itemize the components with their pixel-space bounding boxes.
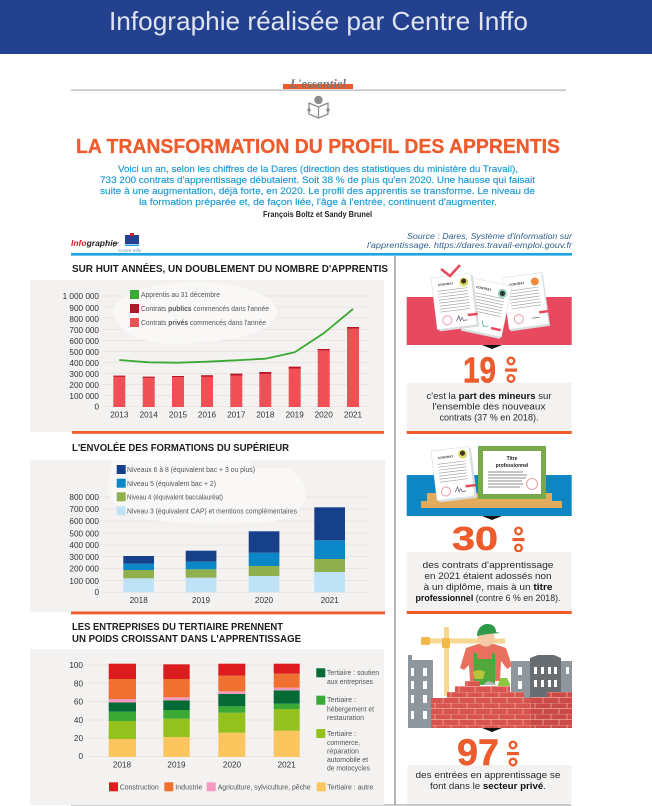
legend: right: de motocycles [327, 766, 370, 772]
legend: apprentices chart: Apprentis au 31 décembre [141, 292, 220, 299]
y axis labels: 100 000 [69, 392, 99, 401]
header banner: Infographie réalisée par Centre Inffo [109, 6, 528, 36]
legend: right: commerce, [327, 740, 360, 747]
certificate: professionnel [496, 463, 529, 469]
legend: right: aux entreprises [327, 679, 373, 686]
y axis labels: 500 000 [69, 348, 99, 357]
section tag: L'essentiel: L'essentiel [289, 76, 346, 91]
heading: supérieur: L'ENVOLÉE DES FORMATIONS DU SUPÉRIEUR [72, 441, 289, 454]
y axis labels: 500 000 [69, 530, 99, 538]
x axis labels: 2019 [167, 760, 186, 770]
legend: apprentices chart: Contrats privés commencés dans l'année [141, 320, 266, 327]
source note: Source : Dares, Système d'information sur [407, 231, 573, 241]
crane [421, 627, 505, 696]
intro text: 733 200 contrats d'apprentissage débutaient. Soit 38 % de plus qu'en 2020. Une hausse qui faisait [100, 175, 535, 186]
legend: levels: Niveau 5 (équivalent bac + 2) [127, 481, 216, 488]
description: private sector: des entrées en apprentissage se [416, 770, 560, 780]
y axis labels: 600 000 [69, 517, 99, 526]
description: title: des contrats d'apprentissage [422, 560, 554, 570]
x axis labels: 2018 [256, 410, 275, 420]
y axis labels: 60 [74, 698, 83, 706]
legend: bottom: Agriculture, sylviculture, pêche [218, 784, 311, 792]
stat: 19 %: 19 [463, 350, 496, 390]
y axis labels: 100 [69, 661, 83, 670]
panel: 30 % titre professionnel [407, 446, 572, 614]
y axis labels: 200 000 [69, 564, 99, 574]
description: title: professionnel (contre 6 % en 2018). [416, 593, 560, 603]
x axis labels: 2014 [140, 410, 158, 420]
legend: bottom: Tertiaire : autre [327, 784, 373, 792]
x axis labels: 2018 [113, 760, 132, 770]
line: apprentices [119, 309, 353, 363]
x axis labels: 2019 [286, 410, 304, 420]
illustration: bricklayer [408, 624, 572, 732]
panel: higher education stacked bars [30, 441, 385, 614]
illustration: contracts on red band [407, 265, 572, 349]
description: minors: contrats (37 % en 2018). [440, 412, 538, 422]
icon: reader with book [307, 96, 330, 118]
check mark [441, 265, 460, 276]
legend: right: Tertiaire : [327, 697, 356, 704]
logo: Infographie Centre Inffo [71, 233, 142, 253]
y axis labels: 20 [74, 734, 83, 743]
y axis labels [69, 493, 99, 597]
description: private sector: font dans le secteur privé . [430, 781, 546, 791]
y axis labels: 40 [74, 716, 83, 725]
x axis labels: 2018 [130, 596, 148, 605]
y axis labels: 700 000 [69, 505, 99, 514]
logo: Infographie Centre Inffo: Centre Inffo [118, 248, 142, 253]
legend: bottom: Industrie [175, 784, 202, 792]
legend: bottom: Construction [120, 784, 159, 792]
worker [460, 624, 512, 691]
x axis labels: 2020 [223, 760, 242, 770]
stat: 97 %: 97 [457, 732, 499, 773]
contract sheet: CONTRAT [438, 454, 453, 460]
legend: right: automobile et [327, 757, 368, 764]
y axis labels: 800 000 [69, 493, 99, 502]
description: private sector [407, 765, 571, 804]
heading: tertiaire [72, 621, 301, 645]
description: title: à un diplôme, mais à un titre [424, 582, 552, 592]
contract middle: CONTRAT [476, 285, 492, 292]
certificate [478, 446, 546, 499]
source note: l'apprentissage. https://dares.travail-emploi.gouv.fr [367, 240, 573, 250]
legend: right: hébergement et [327, 706, 374, 714]
description: minors: l'ensemble des nouveaux [432, 402, 546, 412]
legend: right [316, 668, 379, 772]
intro text: Voici un an, selon les chiffres de la Dares (direction des statistiques du ministère du Travail), [118, 164, 518, 175]
x axis labels: 2020 [315, 410, 333, 420]
stat: 30 %: 30 [452, 520, 498, 557]
y axis labels: 100 000 [69, 577, 99, 586]
panel: 19 % minors [407, 265, 572, 434]
bar 2020 [218, 664, 245, 757]
certificate: Titre [507, 456, 518, 462]
x axis labels: 2013 [110, 410, 129, 420]
panel: sector stacked bars [30, 621, 384, 805]
legend: bottom [109, 782, 373, 792]
y axis labels: 0 [78, 752, 83, 761]
y axis labels: 700 000 [69, 326, 99, 335]
y axis labels: 300 000 [69, 370, 99, 379]
description: title: en 2021 étaient adossés non [424, 571, 552, 581]
heading: doublement: SUR HUIT ANNÉES, UN DOUBLEMENT DU NOMBRE D'APPRENTIS [72, 262, 388, 275]
heading: tertiaire: UN POIDS CROISSANT DANS L'APPRENTISSAGE [72, 633, 301, 645]
y axis labels [69, 661, 83, 761]
y axis labels: 400 000 [69, 541, 99, 550]
y axis labels: 0 [94, 588, 99, 597]
y axis labels: 800 000 [69, 315, 99, 324]
y axis labels: 400 000 [69, 359, 99, 368]
source note [367, 231, 573, 250]
bars [113, 327, 359, 407]
contract right [502, 272, 550, 331]
logo: Infographie Centre Inffo: Infographie [71, 238, 118, 248]
section tag: L'essentiel [71, 76, 566, 91]
x axis labels [130, 596, 339, 605]
x axis labels: 2021 [344, 410, 363, 420]
bar 2019 [163, 664, 190, 757]
x axis labels [110, 410, 363, 420]
legend: right: réparation [327, 748, 359, 756]
description: title [407, 552, 572, 614]
bar 2018 [109, 664, 136, 757]
y axis labels: 0 [94, 402, 99, 412]
authors: François Boltz et Sandy Brunel [263, 210, 372, 219]
intro text: la formation préparée et, de façon liée, l'âge à l'entrée, continuent d'augmenter. [139, 197, 497, 208]
buildings [408, 655, 572, 728]
intro text [100, 164, 535, 208]
x axis labels: 2016 [198, 410, 217, 420]
x axis labels: 2017 [227, 410, 246, 420]
y axis labels: 80 [74, 680, 83, 688]
intro text: suite à une augmentation, déjà forte, en 2020. Le profil des apprentis se transforme. Le niveau de [100, 186, 535, 197]
contract sheet [431, 446, 477, 503]
contract right: CONTRAT [509, 281, 525, 287]
legend: levels [108, 460, 306, 524]
contract left [431, 273, 479, 332]
y axis labels: 900 000 [69, 304, 99, 313]
legend: right: restauration [327, 715, 364, 722]
brick wall [431, 681, 531, 728]
legend: right: Tertiaire : [327, 731, 356, 738]
stat: 30 % [452, 520, 524, 557]
panel: 97 % secteur privé [407, 624, 572, 804]
x axis labels: 2020 [255, 596, 274, 605]
stat: 97 % [457, 732, 519, 773]
x axis labels: 2021 [278, 760, 296, 770]
heading: tertiaire: LES ENTREPRISES DU TERTIAIRE PRENNENT [72, 621, 284, 633]
x axis labels [113, 760, 296, 770]
y axis labels [63, 292, 99, 412]
bar 2021 [274, 664, 300, 757]
contract left: CONTRAT [438, 281, 453, 287]
x axis labels: 2015 [169, 410, 188, 420]
y axis labels: 200 000 [69, 381, 99, 390]
legend: levels: Niveaux 6 à 8 (équivalent bac + 3 ou plus) [127, 467, 255, 474]
x axis labels: 2021 [321, 596, 339, 605]
y axis labels: 1 000 000 [63, 292, 99, 301]
main title: LA TRANSFORMATION DU PROFIL DES APPRENTIS [76, 136, 560, 158]
legend: right: Tertiaire : soutien [327, 670, 379, 677]
contract middle [461, 278, 512, 339]
bars [123, 572, 345, 592]
description: minors: c'est la part des mineurs sur [426, 391, 552, 401]
panel: apprentices line and bar chart [30, 262, 388, 434]
header banner [0, 0, 652, 54]
description: minors [407, 383, 572, 434]
y axis labels: 300 000 [69, 553, 99, 562]
legend: apprentices chart: Contrats publics commencés dans l'année [141, 306, 269, 313]
legend: apprentices chart [113, 282, 277, 344]
legend: levels: Niveau 3 (équivalent CAP) et mentions complémentaires [127, 508, 297, 516]
y axis labels: 600 000 [69, 337, 99, 346]
x axis labels: 2019 [192, 596, 211, 605]
legend: levels: Niveau 4 (équivalent baccalauréat) [127, 494, 223, 502]
illustration: contract and title [407, 446, 572, 520]
